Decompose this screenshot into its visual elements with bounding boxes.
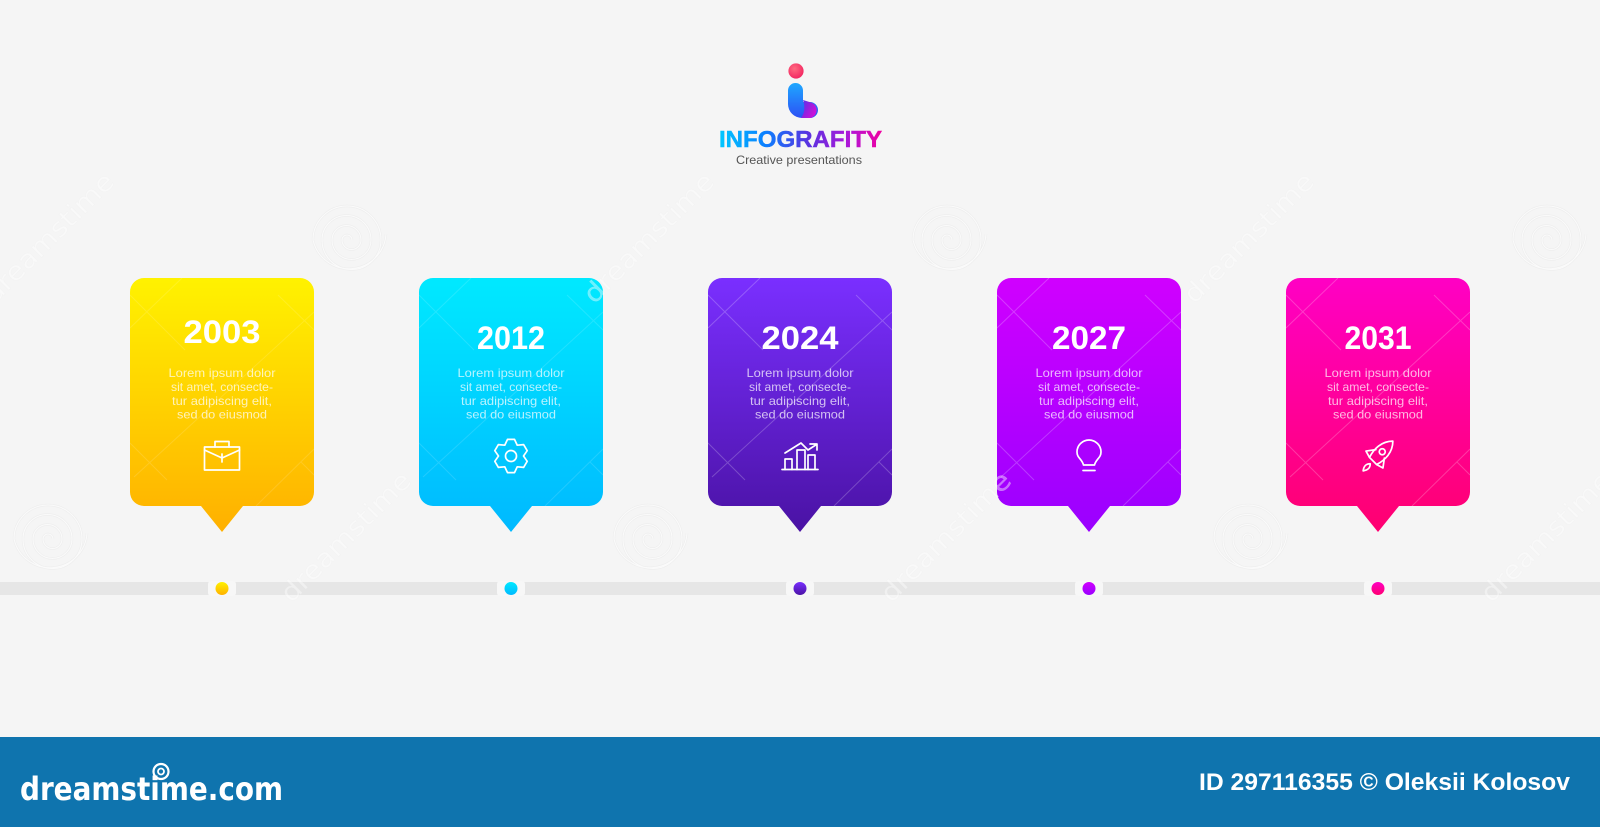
watermark: spirals and diagonal text: dreamstime xyxy=(875,466,1018,609)
year: 2031 xyxy=(1344,320,1412,356)
description xyxy=(1036,366,1143,422)
description: tur adipiscing elit, xyxy=(750,394,850,408)
icon: gear xyxy=(495,439,527,473)
description: sed do eiusmod xyxy=(177,408,267,422)
panel: 2024 xyxy=(708,278,892,532)
watermark: spirals and diagonal text: dreamstime xyxy=(578,167,721,310)
description: Lorem ipsum dolor xyxy=(1324,366,1432,380)
icon: briefcase xyxy=(204,442,240,470)
watermark: spirals and diagonal text: dreamstime xyxy=(1178,167,1321,310)
footer band xyxy=(0,737,1600,827)
description: Lorem ipsum dolor xyxy=(746,366,854,380)
year: 2024 xyxy=(762,320,839,356)
description: tur adipiscing elit, xyxy=(1039,394,1139,408)
panel: 2012 xyxy=(419,278,603,532)
timeline dot 2003 xyxy=(216,582,228,595)
description: sed do eiusmod xyxy=(1044,408,1134,422)
timeline track xyxy=(0,581,1600,596)
description xyxy=(458,366,565,422)
description: sit amet, consecte- xyxy=(1327,380,1429,394)
description: sit amet, consecte- xyxy=(749,380,851,394)
year: 2003 xyxy=(184,314,260,350)
logo: Infografity xyxy=(719,63,882,167)
icon: rocket xyxy=(1355,433,1401,479)
panel: 2003 xyxy=(130,278,314,532)
timeline dot 2031 xyxy=(1372,582,1384,595)
description: Lorem ipsum dolor xyxy=(1036,366,1143,380)
description: sit amet, consecte- xyxy=(460,380,562,394)
footer credit: ID 297116355 © Oleksii Kolosov xyxy=(1199,769,1571,796)
timeline dot 2012 xyxy=(504,582,518,595)
description: sed do eiusmod xyxy=(466,408,556,422)
icon: rising bar chart xyxy=(782,443,818,470)
description xyxy=(746,366,854,422)
timeline dot 2024 xyxy=(794,582,806,595)
footer logo: dreamstime.com: dreamstime.com xyxy=(20,770,283,808)
watermark: spirals and diagonal text xyxy=(0,167,1600,609)
description: Lorem ipsum dolor xyxy=(458,366,565,380)
description: sit amet, consecte- xyxy=(1038,380,1140,394)
description: sed do eiusmod xyxy=(755,408,845,422)
panel: 2027 xyxy=(997,278,1181,532)
icon: logo mark xyxy=(788,63,818,118)
year: 2027 xyxy=(1052,320,1126,356)
description xyxy=(168,366,276,422)
description: Lorem ipsum dolor xyxy=(168,366,276,380)
description xyxy=(1324,366,1432,422)
description: sed do eiusmod xyxy=(1333,408,1423,422)
year: 2012 xyxy=(477,320,545,356)
logo wordmark: INFOGRAFITY xyxy=(719,126,882,152)
panel: 2031 xyxy=(1286,278,1470,532)
watermark: spirals and diagonal text: dreamstime xyxy=(275,466,418,609)
description: tur adipiscing elit, xyxy=(461,394,561,408)
description: sit amet, consecte- xyxy=(171,380,273,394)
timeline dot 2027 xyxy=(1082,582,1096,595)
icon: light bulb xyxy=(1077,440,1101,470)
description: tur adipiscing elit, xyxy=(1328,394,1428,408)
description: tur adipiscing elit, xyxy=(172,394,272,408)
logo tagline: Creative presentations xyxy=(736,153,862,167)
